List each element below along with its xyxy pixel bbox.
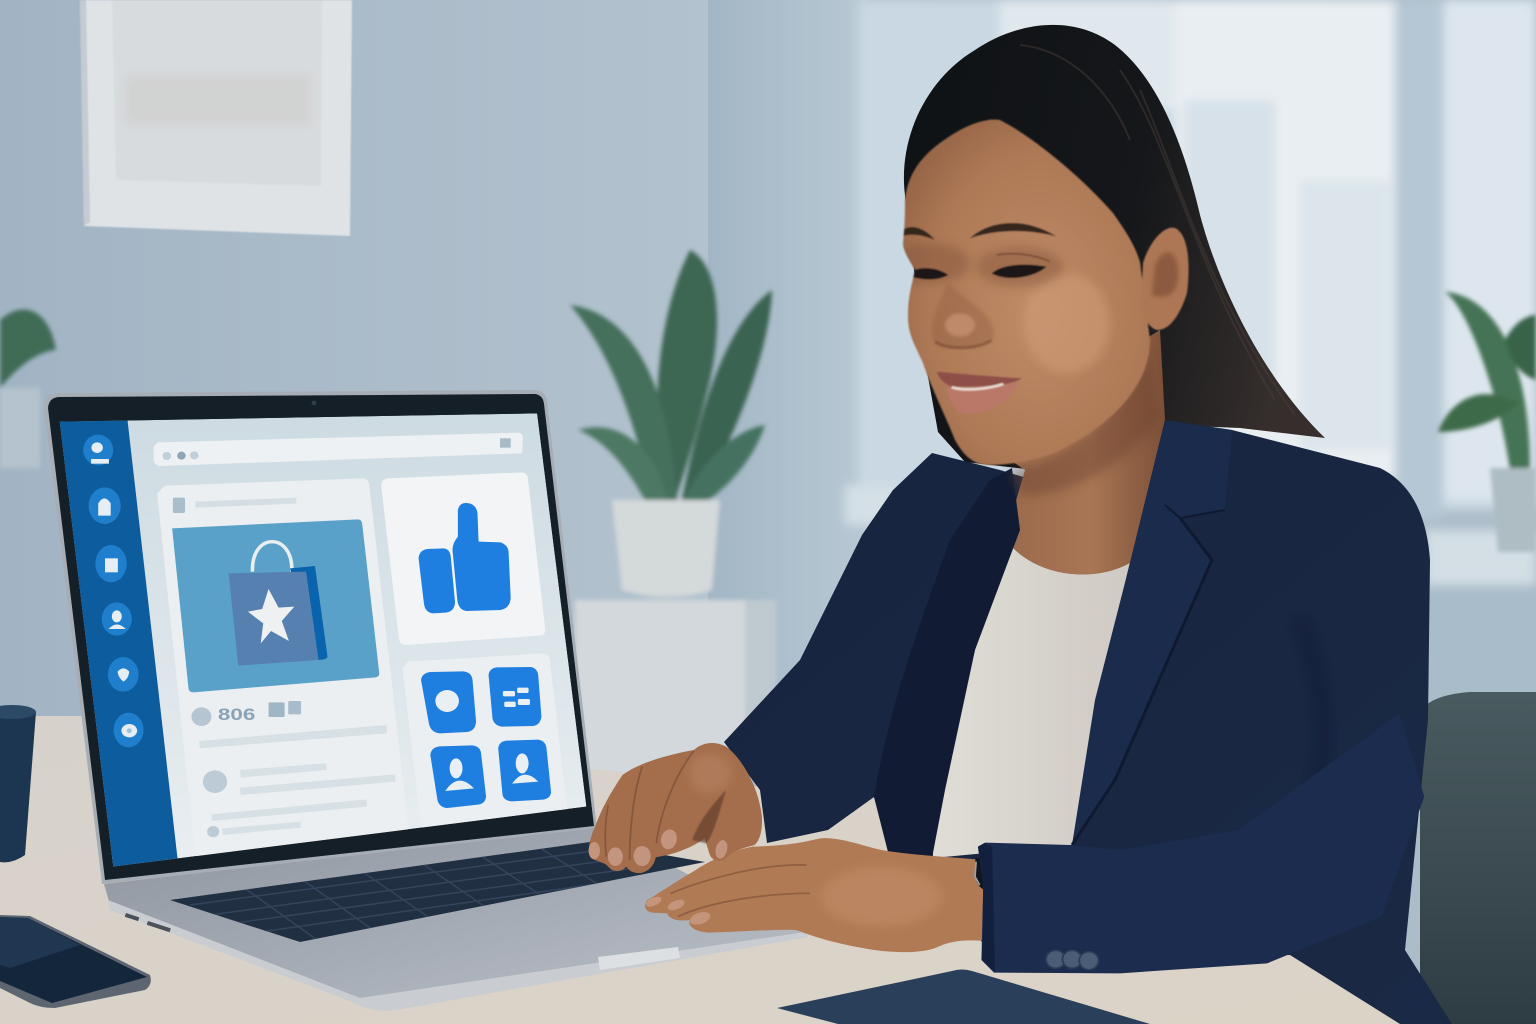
window [845,0,1536,715]
sidebar [60,420,177,867]
icon: person [102,602,132,636]
icon tile: user [501,742,549,799]
hair [904,25,1325,480]
plant: center [570,250,776,775]
counter row: 806 [218,705,255,724]
apps card [402,654,568,828]
shirt [933,538,1130,858]
lapel: right [1072,420,1232,845]
icon tile: grid [491,669,539,724]
plant: left [0,310,56,468]
like card [381,472,545,645]
keyboard [170,842,705,942]
lid and bezel [44,390,597,884]
eyes [992,265,1047,278]
woman: back hair and torso [724,25,1452,1024]
ports [125,913,171,932]
eye socket shade [906,242,970,285]
phone [0,915,151,1008]
icon: square [95,545,127,582]
desk [0,716,1420,1024]
lips [937,372,1022,387]
post card [157,478,410,872]
eyebrows [970,223,1057,238]
blazer torso [724,420,1452,1024]
framed picture [80,0,352,236]
sleeve fold shading [1250,620,1323,880]
icon tile: user [433,748,484,806]
laptop screen [60,413,586,872]
chin shadow on neck [1010,350,1160,496]
cuff buttons [1046,950,1099,970]
webcam [312,400,316,406]
hands and sleeve [589,713,1424,973]
watch [975,857,993,889]
lapel: left [874,468,1020,858]
icon: thumbs up [419,503,511,613]
upper hand [589,743,762,873]
lower hand [644,838,983,952]
search bar [154,433,523,466]
nose [932,283,994,347]
cup [0,705,36,862]
woman: head [890,119,1189,496]
icon tile: clock [424,674,474,731]
icon: eye [114,713,144,747]
neck [980,330,1165,575]
laptop [44,390,808,1010]
base front edge [108,900,808,1010]
icon: location [108,657,139,692]
tablet folio [777,970,1150,1024]
placeholder lines [199,725,395,837]
icon: profile [83,435,113,465]
cheek light [1023,273,1110,373]
ear [1141,228,1189,330]
icon: star [248,589,294,643]
chair [1420,692,1536,1024]
sleeve cuff [978,713,1424,973]
counter row [191,701,301,726]
plant: right [1438,292,1536,552]
product image with bag [172,519,379,692]
face base [903,119,1150,465]
icon: lock [89,487,121,524]
laptop base [104,826,808,1010]
